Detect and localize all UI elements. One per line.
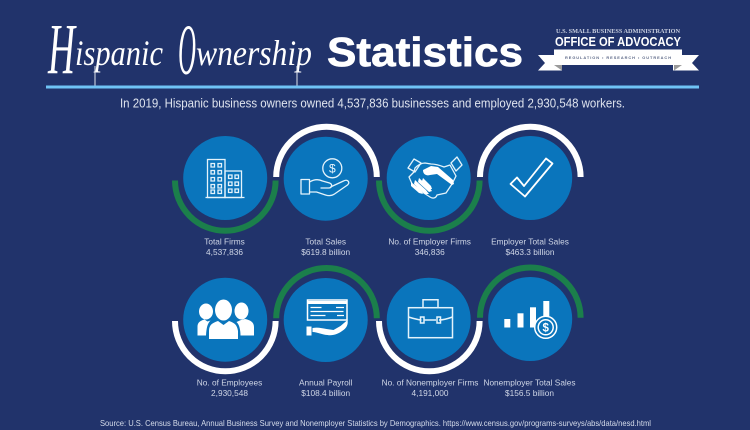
logo: office of advocacy: OFFICE OF ADVOCACY	[555, 35, 682, 49]
icon: people	[198, 300, 254, 339]
label: Annual Payroll	[299, 378, 353, 388]
label: Total Sales	[305, 237, 346, 247]
icon: bars and coin: $	[542, 322, 549, 334]
arc	[379, 321, 480, 371]
title script part: H	[47, 9, 77, 89]
panel: nonemployer firms	[379, 278, 480, 398]
panel: total firms	[175, 136, 276, 257]
arc	[276, 268, 377, 318]
header rule	[46, 86, 699, 88]
label: $463.3 billion	[506, 247, 555, 257]
label: 2,930,548	[211, 388, 248, 398]
label: Employer Total Sales	[491, 237, 569, 247]
label: No. of Employees	[197, 378, 262, 388]
label: 346,836	[415, 247, 445, 257]
title	[47, 9, 523, 90]
logo: office of advocacy: REGULATION • RESEARCH • OUTREACH	[565, 55, 671, 60]
label: Nonemployer Total Sales	[483, 378, 576, 388]
label: 4,191,000	[412, 388, 449, 398]
label: $619.8 billion	[301, 247, 351, 257]
icon: hand with coin: $	[329, 162, 336, 176]
panel: total sales	[276, 127, 377, 257]
arc	[480, 267, 581, 318]
icon: buildings	[206, 160, 244, 198]
source note: Source: U.S. Census Bureau, Annual Business Survey and Nonemployer Statistics by Demographics. https://www.census.gov/programs-surveys/abs/data/nesd.html	[100, 419, 651, 428]
label: No. of Employer Firms	[388, 237, 471, 247]
title bold part: Statistics	[327, 29, 523, 75]
logo: office of advocacy: U.S. SMALL BUSINESS ADMINISTRATION	[556, 28, 681, 35]
label: No. of Nonemployer Firms	[382, 378, 478, 388]
title script part: wnership	[196, 33, 312, 73]
arc	[276, 127, 377, 177]
label: 4,537,836	[206, 247, 243, 257]
arc	[175, 180, 276, 231]
panel: employer firms	[379, 136, 480, 257]
panel: nonemployer total sales	[480, 267, 581, 398]
label: Total Firms	[204, 237, 245, 247]
label: $108.4 billion	[301, 388, 351, 398]
icon: briefcase	[408, 300, 452, 338]
arc	[480, 127, 581, 177]
logo: office of advocacy	[538, 28, 699, 70]
panel: annual payroll	[276, 268, 377, 398]
title script part: O	[172, 10, 196, 90]
arc	[175, 321, 276, 371]
label: $156.5 billion	[505, 388, 554, 398]
subtitle: In 2019, Hispanic business owners owned 4,537,836 businesses and employed 2,930,548 workers.	[120, 96, 625, 110]
arc	[379, 180, 480, 231]
icon: check mark	[510, 158, 552, 196]
panel: employer total sales	[480, 127, 581, 257]
title script part: ispanic	[75, 33, 163, 73]
panel: employees	[175, 278, 276, 398]
icon: handshake	[408, 157, 462, 198]
icon: cheque and hand	[306, 300, 348, 336]
